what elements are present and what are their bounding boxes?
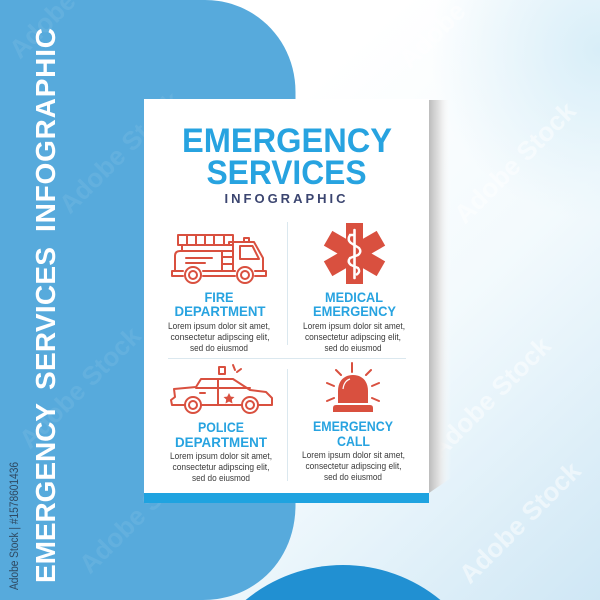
text: fire department: sed do eiusmod [190,343,248,353]
text: police department: consectetur adipscing elit, [172,462,270,472]
text: emergency call: Lorem ipsum dolor sit amet, [302,450,405,460]
card shadow [429,100,451,493]
watermark on light background: Adobe Stock [448,95,582,229]
icon: alarm beacon [327,363,379,412]
text: fire department: consectetur adipscing elit, [170,332,270,342]
heading: emergency call [313,418,394,449]
card title: EMERGENCY [182,122,392,160]
text: police department [170,451,272,483]
vertical title: INFOGRAPHIC [30,28,61,232]
heading: fire department: FIRE [204,289,234,305]
heading: fire department: DEPARTMENT [174,303,266,319]
icon: star of life [324,223,385,284]
text: police department: Lorem ipsum dolor sit amet, [170,451,272,461]
heading: emergency call: CALL [337,433,370,449]
heading: emergency call: EMERGENCY [313,418,394,434]
text: emergency call: consectetur adipscing elit, [306,461,402,471]
text: medical emergency [303,321,405,353]
text: emergency call [302,450,405,482]
card title: INFOGRAPHIC [224,191,346,206]
heading: fire department [174,289,266,319]
heading: police department: DEPARTMENT [175,434,267,450]
watermark [3,0,207,579]
heading: medical emergency [313,289,397,319]
heading: police department: POLICE [198,419,244,435]
watermark on light background [393,0,587,589]
vertical title [30,28,61,583]
card title [182,122,392,206]
icon: fire truck [172,235,266,283]
dividers [168,222,406,481]
text: fire department [168,321,270,353]
watermark: Adobe Stock [13,320,147,454]
watermark on light background: Adobe Stock [453,455,587,589]
blue circle at bottom [246,565,440,600]
watermark: Adobe Stock [73,445,207,579]
card title: SERVICES [206,154,366,192]
icon: police car [171,365,272,413]
text: emergency call: sed do eiusmod [324,472,382,482]
text: medical emergency: consectetur adipscing elit, [305,332,401,342]
text: medical emergency: sed do eiusmod [324,343,382,353]
card [144,99,429,503]
blue left panel [0,0,296,600]
watermark: Adobe Stock [53,85,187,219]
vertical title: SERVICES [30,247,61,390]
watermark on light background: Adobe Stock [423,330,557,464]
text: fire department: Lorem ipsum dolor sit amet, [168,321,270,331]
heading: medical emergency: EMERGENCY [313,303,397,319]
text: police department: sed do eiusmod [192,473,250,483]
stock credit: Adobe Stock | #1578601436 [9,462,21,590]
vertical title: EMERGENCY [30,403,61,583]
heading: police department [175,419,267,450]
text: medical emergency: Lorem ipsum dolor sit amet, [303,321,405,331]
heading: medical emergency: MEDICAL [325,289,383,305]
